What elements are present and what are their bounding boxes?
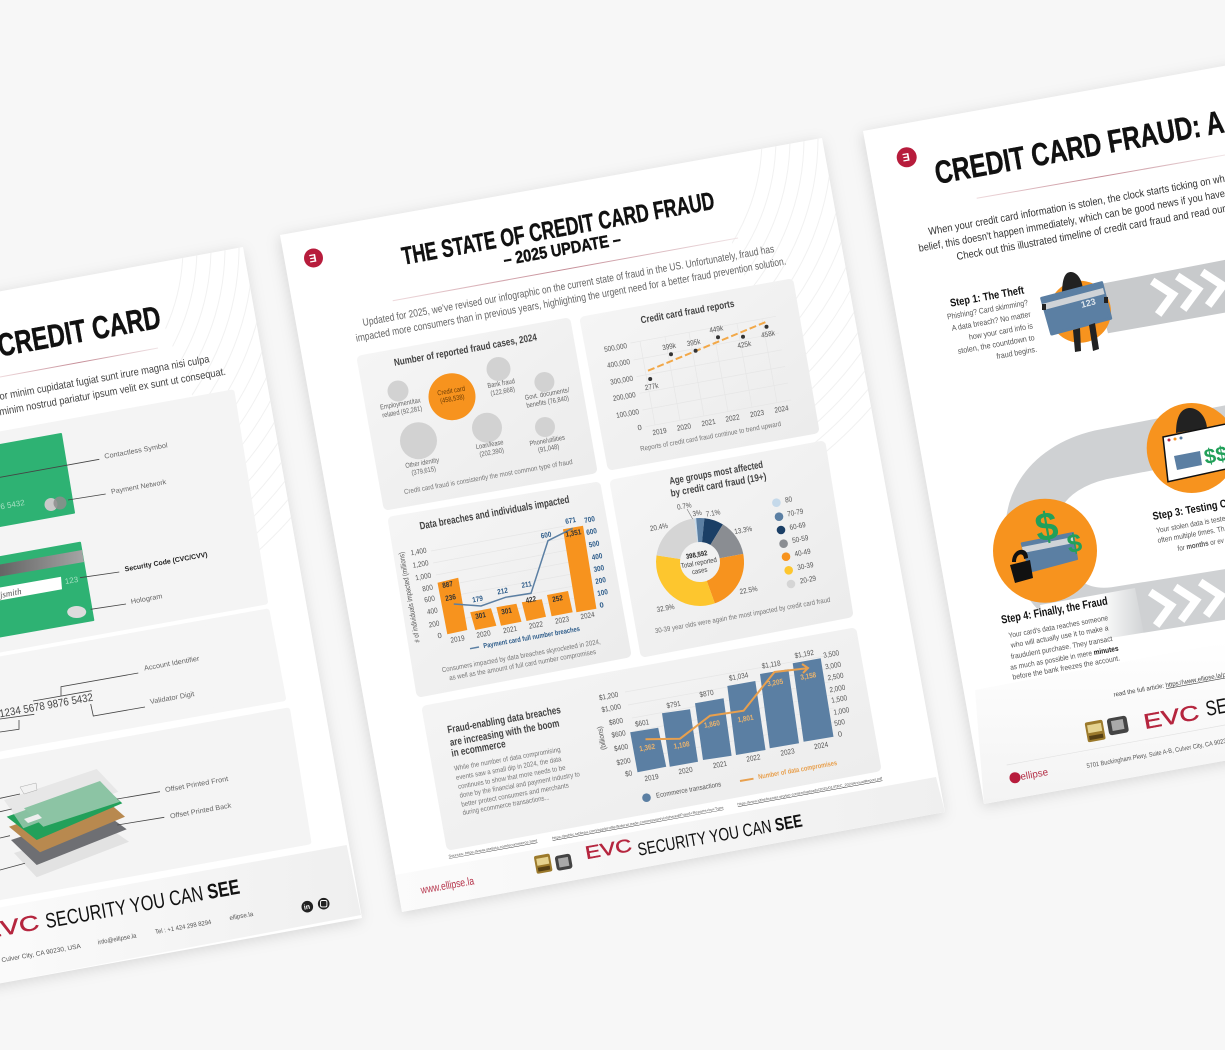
label: hologram: Hologram <box>130 593 163 606</box>
label: contactless symbol: Contactless Symbol <box>104 442 169 461</box>
scatter chart with trend line: 425k <box>737 340 752 350</box>
footer: left page: Tel : +1 424 298 8294 <box>155 919 212 936</box>
combo chart: bars and line: 2019 <box>450 635 465 645</box>
combo chart: bars and line: 2024 <box>580 611 595 621</box>
bubble chart: related (92,281) <box>382 405 423 420</box>
intro text: impacted more consumers than in previous years, highlighting the urgent need for a better fraud prevention solution. <box>355 255 787 345</box>
combo chart: bars and line: 800 <box>422 584 434 594</box>
donut chart: 0.7% <box>677 502 692 512</box>
step 1 text: fraud begins. <box>996 345 1038 361</box>
label: offset printed back: Offset Printed Back <box>170 803 232 820</box>
panel: ecommerce and data breaches <box>427 633 876 845</box>
bubble chart: (202,390) <box>479 447 504 459</box>
combo chart: bars and line: 600 <box>586 528 598 537</box>
panel: card number <box>0 612 283 752</box>
bubble chart: (91,048) <box>538 443 560 455</box>
combo chart: bars and line: 422 <box>525 596 537 605</box>
combo chart: bars and line: 700 <box>584 516 596 525</box>
step 1 text: how your card info is <box>968 321 1034 342</box>
step 4 text: as much as possible in mere minutes <box>1009 644 1119 672</box>
subtitle: – 2025 UPDATE – <box>502 230 622 269</box>
step 4 text: fraudulent purchase. They transact <box>1010 634 1114 661</box>
donut chart: 7.1% <box>705 509 721 519</box>
heading: in ecommerce <box>450 738 507 760</box>
step 1 text <box>946 285 1038 361</box>
combo chart: bars and line: 236 <box>445 594 457 603</box>
panel: credit card fraud reports <box>585 284 814 465</box>
exploded card layers <box>4 769 129 877</box>
combo chart: bars and line: 671 <box>565 517 577 526</box>
combo chart: bars and line: 887 <box>442 581 454 590</box>
donut chart: 22.5% <box>739 586 758 596</box>
combo chart: bars and line: 200 <box>595 577 607 586</box>
combo chart: bars and line: 301 <box>501 607 513 617</box>
icon: card reader <box>1106 715 1129 736</box>
green card back: 123 <box>64 575 79 586</box>
donut chart <box>649 502 758 614</box>
combo chart: ecommerce bars and compromises line: $870 <box>699 689 714 699</box>
panel: card number: 1234 5678 9876 5432 <box>0 692 94 720</box>
heading: by credit card fraud (19+) <box>670 472 767 500</box>
legend: 70-79 <box>787 508 804 519</box>
heading: Age groups most affected <box>669 460 764 487</box>
step 1 text: Phishing? Card skimming? <box>946 298 1029 321</box>
combo chart: ecommerce bars and compromises line: $1,000 <box>601 703 622 714</box>
heading: credit card: CREDIT CARD <box>0 299 163 363</box>
bubble chart: (122,668) <box>490 386 515 398</box>
combo chart: bars and line: # of individuals impacted (millions) <box>397 551 422 644</box>
bubble chart: Other identity <box>405 456 440 470</box>
combo chart: ecommerce bars and compromises line: Number of data compromises <box>758 760 838 781</box>
combo chart: ecommerce bars and compromises line: 3,500 <box>823 650 840 660</box>
combo chart: bars and line: 2021 <box>503 625 518 635</box>
logo: Ǝ <box>901 151 911 165</box>
combo chart: bars and line: 300 <box>593 565 605 574</box>
tagline: SECURITY YOU CAN SEE <box>636 810 804 860</box>
legend: 50-59 <box>792 535 809 545</box>
scatter chart with trend line: 2023 <box>750 409 765 419</box>
bubble chart: (458,538) <box>440 393 465 405</box>
combo chart: bars and line: 400 <box>591 553 603 562</box>
heading: Credit card fraud reports <box>640 299 736 326</box>
donut chart: 3% <box>692 509 702 518</box>
combo chart: ecommerce bars and compromises line: 1,500 <box>831 695 848 705</box>
heading: Number of reported fraud cases, 2024 <box>393 332 538 369</box>
combo chart: ecommerce bars and compromises line: 1,362 <box>639 743 656 754</box>
combo chart: bars and line: 200 <box>428 620 440 630</box>
page: anatomy of a credit card (left) <box>0 248 364 990</box>
combo chart: bars and line: 1,351 <box>565 529 582 539</box>
heading: are increasing with the boom <box>449 717 560 749</box>
panel: card front and back <box>0 393 265 653</box>
bubble chart: Govt. documents/ <box>524 387 570 402</box>
page: credit card fraud timeline (right) <box>863 63 1225 804</box>
combo chart: ecommerce bars and compromises line: 2020 <box>678 766 693 776</box>
illustration: thief with card <box>1042 272 1111 352</box>
page: state of credit card fraud (centre) <box>276 138 946 918</box>
donut chart: 398,592 <box>685 550 708 561</box>
source links: Sources: https://www.statista.com/ecommerce.html <box>448 839 538 858</box>
combo chart: bars and line: 400 <box>427 607 438 617</box>
combo chart: ecommerce bars and compromises line: 3,158 <box>800 672 817 682</box>
combo chart: ecommerce bars and compromises line: $601 <box>635 719 650 729</box>
caption: Consumers impacted by data breaches skyrocketed in 2024, <box>441 639 601 674</box>
combo chart: ecommerce bars and compromises line: 0 <box>837 729 843 739</box>
panel: number of reported fraud cases <box>362 323 592 505</box>
panel: data breaches and individuals impacted <box>393 487 626 692</box>
combo chart: ecommerce bars and compromises line: $600 <box>611 730 626 740</box>
legend: 60-69 <box>789 522 807 532</box>
combo chart: ecommerce bars and compromises line: 2022 <box>746 754 761 764</box>
scatter chart with trend line: 500,000 <box>604 343 628 354</box>
timeline band: step 1 <box>1095 257 1225 333</box>
body text: during ecommerce transactions... <box>462 794 550 817</box>
logo <box>897 147 917 167</box>
illustration: step 4 fraud: $ <box>1065 527 1085 559</box>
illustration: step 3 testing <box>1147 403 1225 493</box>
heading <box>446 704 562 760</box>
body text: While the number of data compromising <box>454 747 561 773</box>
step 3 text <box>1152 498 1225 553</box>
combo chart: ecommerce bars and compromises line: 3,205 <box>767 678 784 689</box>
combo chart: ecommerce bars and compromises line: $791 <box>666 700 681 710</box>
caption: as well as the amount of full card number compromises <box>449 649 597 682</box>
combo chart: bars and line: 0 <box>599 600 604 610</box>
combo chart: ecommerce bars and compromises line: $0 <box>625 770 633 779</box>
scatter chart with trend line: 449k <box>709 325 724 335</box>
scatter chart with trend line: 2019 <box>652 427 667 437</box>
combo chart: bars and line: 252 <box>552 595 564 604</box>
combo chart: ecommerce bars and compromises line: $1,118 <box>761 660 781 671</box>
step 4 text: who will actually use it to make a <box>1009 623 1110 650</box>
combo chart: bars and line: 2023 <box>555 616 570 626</box>
bubble chart: (379,615) <box>411 465 436 477</box>
heading: Fraud-enabling data breaches <box>446 704 562 736</box>
scatter chart with trend line: 458k <box>761 330 776 340</box>
scatter chart with trend line: 277k <box>644 382 660 392</box>
logo: EVC: EVC <box>1142 701 1201 734</box>
combo chart: ecommerce bars and compromises line: 1,801 <box>737 714 754 725</box>
intro text: Updated for 2025, we've revised our infographic on the current state of fraud in the US. Unfortunately, fraud has <box>362 243 775 329</box>
donut chart: 13.3% <box>734 526 753 536</box>
body text: better protect consumers and merchants <box>461 782 570 809</box>
step 1 text: A data breach? No matter <box>951 310 1032 333</box>
bubble chart <box>380 357 570 477</box>
combo chart: ecommerce bars and compromises line: 1,860 <box>704 720 721 730</box>
scatter chart with trend line: 2024 <box>774 405 789 415</box>
step 1 text: stolen, the countdown to <box>957 333 1036 356</box>
green card back <box>0 543 93 640</box>
label: security code: Security Code (CVC/CVV) <box>124 552 208 573</box>
step 1 text: Step 1: The Theft <box>949 285 1025 310</box>
footer: left page: SECURITY YOU CAN SEE <box>44 876 242 933</box>
combo chart: bars and line: 2022 <box>528 621 544 631</box>
source links: https://public.tableau.com/app/profile/federal.trade.commission/viz/shared/Fraud+Reports+by+Type <box>552 806 724 840</box>
scatter chart with trend line: 100,000 <box>616 409 640 420</box>
scatter chart with trend line: 2020 <box>676 423 692 433</box>
source links <box>448 777 883 858</box>
legend: 30-39 <box>797 562 814 572</box>
donut chart: 20.4% <box>649 523 669 533</box>
caption: Credit card fraud is consistently the most common type of fraud <box>404 459 573 496</box>
scatter chart with trend line: 0 <box>637 423 642 432</box>
bubble chart: benefits (76,840) <box>526 395 570 410</box>
combo chart: bars and line <box>397 516 609 650</box>
combo chart: ecommerce bars and compromises line: 2,000 <box>829 684 846 695</box>
footer: left page: info@ellipse.la <box>97 933 137 946</box>
combo chart: ecommerce bars and compromises line: $200 <box>616 757 631 767</box>
combo chart: ecommerce bars and compromises line: 1,108 <box>673 741 690 751</box>
donut chart: cases <box>691 566 709 576</box>
footer: left page: ellipse.la <box>229 911 254 922</box>
combo chart: ecommerce bars and compromises line: $1,034 <box>728 672 749 683</box>
panel: age groups <box>615 446 848 652</box>
scatter chart with trend line: 2021 <box>701 418 716 428</box>
step 4 text <box>1000 596 1121 682</box>
legend <box>772 496 817 588</box>
label: offset printed front: Offset Printed Front <box>165 776 229 794</box>
legend: 40-49 <box>794 548 812 559</box>
label: account identifier: Account Identifier <box>144 655 201 672</box>
combo chart: bars and line: 1,200 <box>412 560 429 570</box>
combo chart: ecommerce bars and compromises line: 2021 <box>712 760 728 770</box>
combo chart: ecommerce bars and compromises line: 2023 <box>780 748 795 758</box>
combo chart: ecommerce bars and compromises line: 500 <box>834 719 846 728</box>
combo chart: bars and line: 1,400 <box>410 547 427 558</box>
combo chart: ecommerce bars and compromises line: $800 <box>608 717 624 727</box>
combo chart: ecommerce bars and compromises line: 2019 <box>644 773 659 783</box>
combo chart: bars and line: 2020 <box>476 630 491 640</box>
combo chart: bars and line: 600 <box>424 595 436 605</box>
illustration: thief with card: 123 <box>1080 296 1097 310</box>
combo chart: bars and line: 211 <box>521 581 533 590</box>
label: validator digit: Validator Digit <box>149 691 195 706</box>
combo chart: ecommerce bars and compromises line: $400 <box>614 743 629 753</box>
combo chart: bars and line: 100 <box>597 589 609 598</box>
caption: 30-39 year olds were again the most impacted by credit card fraud <box>655 597 831 635</box>
green card front <box>0 434 74 530</box>
footer: right page <box>1010 663 1225 783</box>
footer: centre page <box>419 810 804 897</box>
icon: linkedin <box>302 901 313 912</box>
combo chart: ecommerce bars and compromises line: 2024 <box>814 741 829 751</box>
step 4 text: Your card's data reaches someone <box>1008 613 1109 640</box>
combo chart: ecommerce bars and compromises line: 2,500 <box>827 672 844 683</box>
combo chart: bars and line: 179 <box>472 595 484 605</box>
scatter chart with trend line: 2022 <box>725 414 740 424</box>
scatter chart with trend line: 300,000 <box>610 375 634 387</box>
step 4 text: before the bank freezes the account. <box>1012 653 1121 682</box>
body text: continues to show that more needs to be <box>458 765 566 791</box>
combo chart: ecommerce bars and compromises line: (billions) <box>597 726 608 750</box>
combo chart: bars and line: 212 <box>497 587 509 597</box>
donut chart: 32.9% <box>656 604 675 614</box>
combo chart: bars and line: 600 <box>540 531 552 541</box>
logo <box>304 248 323 268</box>
bubble chart: Credit card <box>437 385 466 398</box>
heading: Data breaches and individuals impacted <box>419 494 570 532</box>
icon: linkedin: in <box>303 904 311 912</box>
bubble chart: Phone/utilities <box>529 434 566 448</box>
panel: card layers <box>0 711 308 901</box>
scatter chart with trend line: 400,000 <box>607 359 631 370</box>
combo chart: bars and line: 0 <box>437 631 442 640</box>
combo chart: ecommerce bars and compromises line: $1,192 <box>794 649 815 660</box>
bubble chart: Loan/lease <box>475 439 505 451</box>
logo: ellipse: ellipse <box>1020 767 1050 783</box>
scatter chart with trend line <box>604 316 791 437</box>
logo: Ǝ <box>308 252 318 266</box>
combo chart: ecommerce bars and compromises line: $1,200 <box>598 691 619 702</box>
icon: point-of-sale terminal <box>534 853 553 874</box>
title: THE STATE OF CREDIT CARD FRAUD <box>400 187 717 271</box>
scatter chart with trend line: 200,000 <box>612 392 637 403</box>
combo chart: bars and line: 301 <box>475 612 487 621</box>
body text: done by the financial and payment industry to <box>459 771 581 800</box>
timeline band: u-turn <box>1030 428 1225 668</box>
website: www.ellipse.la <box>419 875 476 897</box>
legend: 20-29 <box>799 575 817 586</box>
donut chart: Total reported <box>680 556 718 570</box>
icon: instagram <box>318 898 330 910</box>
logo: EVC: EVC <box>584 835 633 863</box>
intro text: minim nostrud pariatur ipsum velit ex sunt ut consequat. <box>0 366 227 418</box>
bubble chart: Bank fraud <box>487 378 516 390</box>
combo chart: ecommerce bars and compromises line: 1,000 <box>833 707 850 717</box>
combo chart: ecommerce bars and compromises line <box>597 649 850 802</box>
legend: 80 <box>785 496 793 505</box>
icon: card reader <box>554 853 573 871</box>
combo chart: bars and line: 500 <box>588 540 600 550</box>
body text: events saw a small dip in 2024, the data <box>456 756 562 782</box>
scatter chart with trend line: 395k <box>686 338 702 348</box>
source links: https://www.idtheftcenter.org/wp-content/uploads/2025/01/ITRC_2024AnnualReport.pdf <box>737 777 883 806</box>
combo chart: bars and line: Payment card full number breaches <box>483 626 581 650</box>
caption: Reports of credit card fraud continue to trend upward <box>640 421 782 453</box>
combo chart: ecommerce bars and compromises line: Ecommerce transactions <box>656 781 722 800</box>
label: payment network: Payment Network <box>111 479 167 496</box>
illustration: step 4 fraud: $ <box>1032 504 1062 551</box>
heading <box>669 460 767 500</box>
body text <box>454 747 581 817</box>
step 4 text: Step 4: Finally, the Fraud <box>1000 596 1109 627</box>
illustration: step 4 fraud <box>993 499 1097 603</box>
scatter chart with trend line: 399k <box>662 342 677 352</box>
bubble chart: Employment/tax <box>380 397 422 412</box>
combo chart: ecommerce bars and compromises line: 3,000 <box>825 661 842 672</box>
intro text: or minim cupidatat fugiat sunt irure magna nisi culpa <box>0 353 210 403</box>
icon: point-of-sale terminal <box>1085 720 1106 742</box>
footer: left page <box>0 876 330 982</box>
combo chart: bars and line: 1,000 <box>415 572 432 583</box>
